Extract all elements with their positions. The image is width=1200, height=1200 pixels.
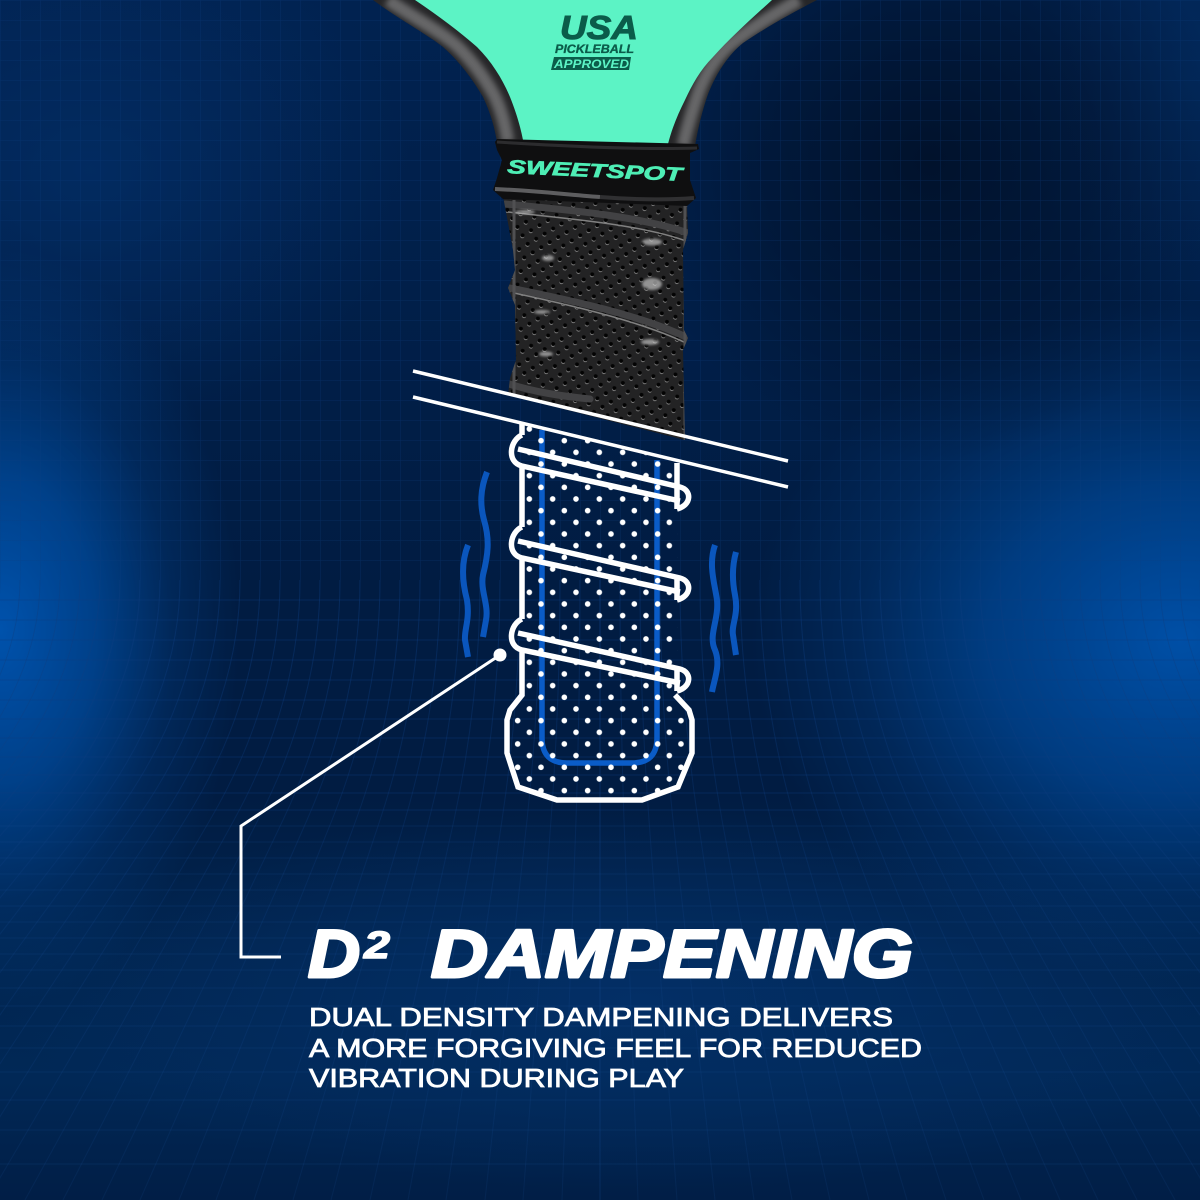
grip wrap: [504, 199, 688, 440]
paddle mint face: [415, 0, 772, 144]
paddle frame: [373, 0, 817, 146]
diagram: grip cross-section: [500, 420, 700, 805]
foam dots: [514, 426, 684, 794]
paddle head: [373, 0, 817, 146]
description text: [309, 1004, 922, 1093]
outline: [507, 423, 692, 800]
grip ridges: [505, 204, 688, 399]
wrap bands: [511, 435, 689, 691]
callout leader: [241, 648, 506, 957]
USA Pickleball approved mark: [551, 9, 638, 71]
description text: A MORE FORGIVING FEEL FOR REDUCED: [309, 1035, 922, 1063]
description text: DUAL DENSITY DAMPENING DELIVERS: [309, 1004, 893, 1032]
description text: VIBRATION DURING PLAY: [309, 1065, 684, 1093]
collar with brand: [493, 139, 699, 206]
grip highlights: [515, 210, 662, 356]
heading: 2: [363, 925, 390, 967]
vibration waves: [463, 472, 736, 692]
heading: D: [308, 916, 360, 992]
dense core: [542, 430, 657, 763]
heading: [308, 916, 913, 992]
USA Pickleball approved mark: PICKLEBALL: [555, 44, 634, 56]
section cut lines: [413, 371, 788, 487]
USA Pickleball approved mark: USA: [560, 9, 638, 46]
USA Pickleball approved mark: APPROVED: [553, 57, 629, 71]
heading: DAMPENING: [431, 916, 913, 992]
brand name: SWEETSPOT: [507, 157, 685, 186]
